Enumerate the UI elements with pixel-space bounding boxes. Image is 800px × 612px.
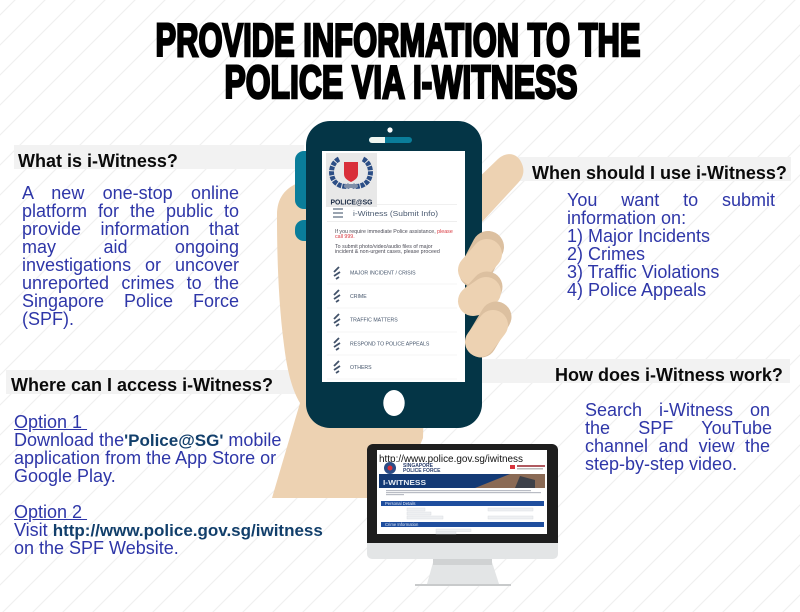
screen menu rows: CRIME: [350, 294, 367, 300]
screen menu rows: RESPOND TO POLICE APPEALS: [350, 342, 430, 348]
title: POLICE VIA I-WITNESS: [224, 56, 578, 108]
icon: phone camera: [387, 127, 393, 133]
icon: thumb: [470, 154, 523, 235]
website form: personal details: [381, 501, 544, 519]
icon: home button: [383, 390, 405, 416]
website notes: [386, 490, 541, 495]
screen notice: If you require immediate Police assistance, please: [335, 229, 453, 235]
screen menu rows: MAJOR INCIDENT / CRISIS: [350, 270, 416, 276]
heading: when should I use i-Witness: When should I use i-Witness?: [532, 163, 787, 183]
panel: website screenshot: http://www.police.gov.sg/iwitness: [379, 454, 523, 465]
text block: where can I access i-Witness: application from the App Store or: [14, 448, 276, 468]
text block: what is i-Witness: A new one-stop online: [22, 183, 239, 203]
text block: when should I use i-Witness: 2) Crimes: [567, 244, 645, 264]
text block: how does i-Witness work: Search i-Witness on: [585, 400, 770, 420]
text block: how does i-Witness work: the SPF YouTube: [585, 418, 772, 438]
text block: when should I use i-Witness: You want to submit: [567, 190, 775, 210]
icon: phone speaker: [369, 137, 412, 143]
icon: monitor frame: [367, 444, 558, 543]
icon: police crest: POLICE@SG: [330, 200, 373, 206]
text block: where can I access i-Witness: on the SPF Website.: [14, 538, 179, 558]
icon: fingers: [473, 247, 496, 342]
screen header: i-Witness (Submit Info): [353, 209, 438, 218]
heading: where can I access i-Witness: Where can I access i-Witness?: [11, 375, 273, 395]
text block: when should I use i-Witness: 4) Police Appeals: [567, 280, 706, 300]
text block: what is i-Witness: investigations or uncover: [22, 255, 239, 275]
text block: what is i-Witness: Singapore Police Force: [22, 291, 239, 311]
icon: side buttons: [295, 151, 325, 241]
screen header: [327, 204, 457, 222]
text block: where can I access i-Witness: Option 2: [14, 502, 82, 522]
text block: how does i-Witness work: [585, 400, 772, 474]
screen notice: incident & non-urgent cases, please proceed: [335, 249, 440, 255]
icon: monitor chin: [367, 543, 558, 559]
text block: where can I access i-Witness: Google Play.: [14, 466, 116, 486]
panel: phone screen: [322, 151, 465, 382]
text block: where can I access i-Witness: Visit http://www.police.gov.sg/iwitness: [14, 520, 323, 540]
text block: what is i-Witness: platform for the public to: [22, 201, 239, 221]
icon: police crest: [326, 153, 377, 207]
screen notice: To submit photo/video/audio files of major: [335, 244, 433, 250]
screen menu rows: [327, 267, 457, 379]
website banner: [379, 474, 545, 488]
heading band: what is: [14, 145, 304, 169]
website logo: POLICE FORCE: [403, 468, 441, 474]
website logo: SINGAPORE: [403, 463, 434, 469]
icon: monitor stand: [415, 559, 511, 586]
website logo: [384, 462, 545, 474]
text block: where can I access i-Witness: [14, 412, 323, 558]
icon: phone body: [306, 121, 482, 428]
heading: how does i-Witness work: How does i-Witness work?: [555, 365, 783, 385]
website form: crime information: Crime Information: [385, 522, 419, 527]
text block: what is i-Witness: may aid ongoing: [22, 237, 239, 257]
icon: hand palm and wrist: [272, 182, 430, 498]
panel: website screenshot: [377, 450, 547, 534]
screen notice: [335, 229, 453, 255]
website banner: I-WITNESS: [383, 478, 426, 487]
website form: personal details: Personal Details: [385, 501, 416, 506]
text block: what is i-Witness: [22, 183, 239, 329]
text block: what is i-Witness: (SPF).: [22, 309, 74, 329]
text block: how does i-Witness work: step-by-step video.: [585, 454, 737, 474]
text block: where can I access i-Witness: Download the'Police@SG' mobile: [14, 430, 281, 450]
text block: when should I use i-Witness: information on:: [567, 208, 686, 228]
heading band: how: [480, 359, 790, 383]
screen menu rows: TRAFFIC MATTERS: [350, 318, 398, 324]
text block: what is i-Witness: unreported crimes to the: [22, 273, 239, 293]
screen notice: call 999.: [335, 234, 355, 240]
heading band: when: [510, 157, 791, 181]
text block: what is i-Witness: provide information that: [22, 219, 239, 239]
text block: when should I use i-Witness: [567, 190, 775, 300]
text block: when should I use i-Witness: 1) Major Incidents: [567, 226, 710, 246]
text block: where can I access i-Witness: Option 1: [14, 412, 82, 432]
text block: when should I use i-Witness: 3) Traffic Violations: [567, 262, 719, 282]
text block: how does i-Witness work: channel and view the: [585, 436, 770, 456]
screen menu rows: OTHERS: [350, 365, 372, 371]
heading: what is i-Witness: What is i-Witness?: [18, 151, 178, 171]
heading band: where: [6, 370, 296, 394]
website form: crime information: [381, 522, 544, 534]
